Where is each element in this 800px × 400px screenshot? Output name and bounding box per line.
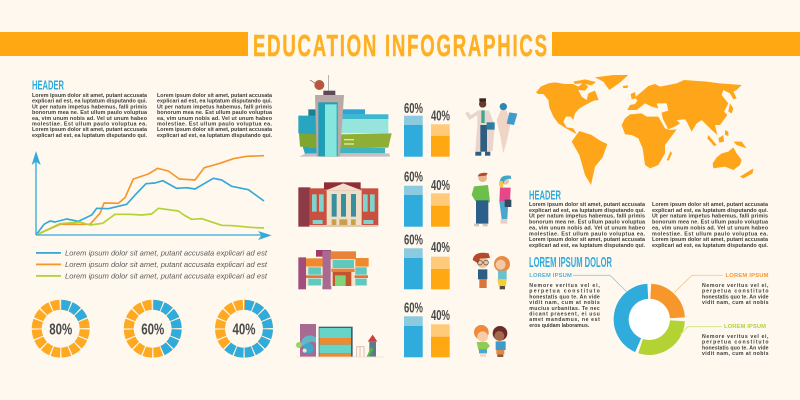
donut gauge 60% (128, 304, 178, 354)
callout: orange: honestatis quo te. An vide (702, 294, 769, 300)
text block: right column: explicari ad est, ea luptatum disputando qui. (652, 208, 768, 214)
arctic islands (573, 79, 596, 85)
callout: blue (529, 273, 627, 329)
donut gauge 60%: 60% (141, 322, 164, 338)
title banner (0, 29, 800, 63)
text block: right column: Lorem ipsum dolor sit amet, putant accusata (652, 237, 769, 243)
icon: kindergarten building (296, 324, 383, 357)
text block: right column: explicari ad est, ea luptatum disputando qui. (157, 99, 272, 105)
text block: right column: ea, vim unum nobis ad. Vel ut unum habeo (652, 225, 769, 231)
bar group: row 4: 60% (404, 300, 423, 316)
text block: left column: explicari ad est, ea luptatum disputando qui. (32, 99, 148, 105)
bar group: row 4: 40% (431, 308, 450, 324)
icon: college building (298, 182, 378, 227)
callout: blue: eros quidam laboramus. (529, 323, 590, 329)
africa (622, 113, 677, 168)
callout: blue: perpetua constituto (529, 289, 600, 295)
text block: right column (652, 202, 769, 249)
bar group: row 2: 60% (404, 170, 423, 186)
callout: blue: vidit nam, cum at nobis (529, 300, 600, 306)
donut gauge 80%: 80% (49, 322, 72, 338)
heading: header: HEADER (529, 188, 561, 202)
callout: green: vidit nam, cum at nobis (702, 351, 769, 357)
green line (36, 208, 264, 235)
callout: blue: mucius urbanitas. Te nec (529, 306, 600, 312)
text block: left column: Lorem ipsum dolor sit amet, putant accusata (529, 237, 646, 243)
bar group: row 4 (404, 300, 450, 357)
text block: left column: ea, vim unum nobis ad. Vel ut unum habeo (32, 116, 148, 122)
donut gauge 80% (36, 304, 86, 354)
title: EDUCATION INFOGRAPHICS (253, 29, 547, 63)
segment: blue (621, 291, 648, 345)
chart legend (36, 250, 268, 281)
text block: right column: molestiae. Est ullum paulo voluptua ea. (652, 231, 768, 237)
text block: left column: ea, vim unum nobis ad. Vel ut unum habeo (529, 225, 646, 231)
text block: right column: explicari ad est, ea luptatum disputando qui. (652, 243, 768, 249)
callout: green: LOREM IPSUM (724, 324, 766, 330)
chart legend: Lorem ipsum dolor sit amet, putant accusata explicari ad est (65, 274, 268, 281)
callout: orange: vidit nam, cum at nobis (702, 300, 769, 306)
text block: right column: bonorum mea ne. Est ullum paulo voluptua (157, 110, 273, 116)
text block: right column: Ut per natum impetus habemus, falli primis (157, 104, 272, 110)
blue line (36, 178, 264, 235)
text block: left column: explicari ad est, ea luptatum disputando qui. (529, 243, 646, 249)
south america (572, 131, 607, 185)
callout: green (680, 324, 769, 357)
callout: orange: Nemore veritus vel ei, (702, 283, 769, 289)
bar group: row 2: 40% (431, 178, 450, 194)
north america (536, 82, 599, 134)
axes (32, 151, 272, 240)
chart legend: Lorem ipsum dolor sit amet, putant accusata explicari ad est (65, 262, 268, 269)
heading: lorem ipsum dolor: LOREM IPSUM DOLOR (529, 255, 612, 271)
world map (536, 75, 753, 185)
callout: blue: honestatis quo te. An vide (529, 294, 600, 300)
text block: left column: molestiae. Est ullum paulo voluptua ea. (32, 122, 148, 128)
callout: blue: LOREM IPSUM (529, 273, 572, 279)
icon: school building (298, 250, 369, 289)
line chart (32, 151, 272, 240)
text block: left column: bonorum mea ne. Est ullum paulo voluptua (32, 110, 148, 116)
donut gauge 40% (219, 304, 269, 354)
heading: header: HEADER (32, 78, 64, 92)
europe and asia (627, 80, 742, 135)
text block: left column: Lorem ipsum dolor sit amet, putant accusata (32, 93, 148, 99)
segment: green (641, 321, 677, 347)
panel: right header text (529, 188, 769, 249)
bar group: row 1: 60% (404, 101, 423, 117)
text block: right column: explicari ad est, ea luptatum disputando qui. (157, 133, 272, 139)
text block: left column: explicari ad est, ea luptatum disputando qui. (32, 133, 148, 139)
bar group: row 1: 40% (431, 108, 450, 124)
bar group: row 2 (404, 170, 450, 227)
text block: left column: Ut per natum impetus habemus, falli primis (32, 104, 147, 110)
text block: right column: Lorem ipsum dolor sit amet, putant accusata (157, 127, 273, 133)
text block: left column (529, 202, 646, 249)
segment: orange (651, 291, 677, 318)
panel: left header text (32, 78, 273, 139)
text block: right column: Lorem ipsum dolor sit amet, putant accusata (652, 202, 769, 208)
text block: left column: Ut per natum impetus habemus, falli primis (529, 214, 645, 220)
islands (623, 85, 753, 178)
callout: orange: perpetua constituto (702, 289, 768, 295)
text block: right column: ea, vim unum nobis ad. Vel ut unum habeo (157, 116, 273, 122)
text block: right column: molestiae. Est ullum paulo voluptua ea. (157, 122, 272, 128)
callout: green: honestatis quo te. An vide (702, 345, 769, 351)
australia (713, 147, 742, 170)
greenland (595, 75, 628, 90)
text block: right column: Lorem ipsum dolor sit amet, putant accusata (157, 93, 273, 99)
icon: doctor and nurse (467, 98, 517, 156)
text block: right column: Ut per natum impetus habemus, falli primis (652, 214, 768, 220)
text block: left column: Lorem ipsum dolor sit amet, putant accusata (529, 202, 646, 208)
text block: right column: bonorum mea ne. Est ullum paulo voluptua (652, 220, 769, 226)
text block: left column: molestiae. Est ullum paulo voluptua ea. (529, 231, 646, 237)
chart legend: Lorem ipsum dolor sit amet, putant accusata explicari ad est (65, 250, 268, 257)
callout: green: perpetua constituto (702, 340, 768, 346)
bar group: row 3: 60% (404, 232, 423, 248)
callout: orange: LOREM IPSUM (726, 273, 769, 279)
icon: toddlers (474, 325, 507, 357)
callout: blue: dicant praesent, ei usu (529, 312, 600, 318)
text block: left column: explicari ad est, ea luptatum disputando qui. (529, 208, 646, 214)
bar group: row 3: 40% (431, 240, 450, 256)
icon: university building (298, 75, 392, 157)
donut chart (621, 291, 677, 347)
text block: left column (32, 93, 148, 139)
text block: left column: bonorum mea ne. Est ullum paulo voluptua (529, 220, 646, 226)
callout: green: Nemore veritus vel ei, (702, 334, 769, 340)
icon: teenagers (472, 173, 511, 226)
donut gauge 40%: 40% (232, 322, 256, 338)
callout: orange (674, 273, 769, 306)
bar group: row 1 (404, 101, 450, 157)
orange line (36, 156, 264, 235)
callout: blue: amet mandamus, ne est (529, 317, 600, 323)
icon: school kids (473, 253, 510, 289)
bar group: row 3 (404, 232, 450, 289)
text block: right column (157, 93, 273, 139)
text block: left column: Lorem ipsum dolor sit amet, putant accusata (32, 127, 148, 133)
callout: blue: Nemore veritus vel ei, (529, 283, 600, 289)
